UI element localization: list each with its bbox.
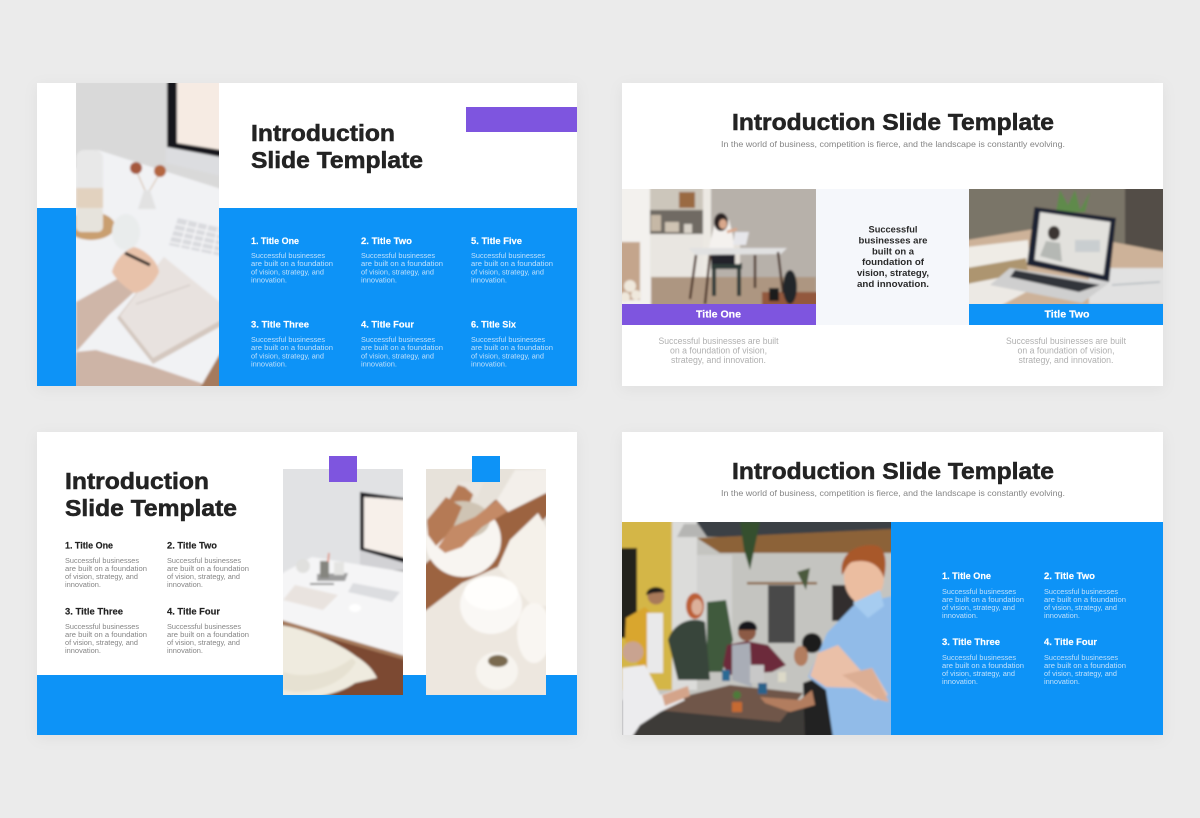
- slide 4 subtitle: In the world of business, competition is fierce, and the landscape is constantly evolving.: [721, 488, 1065, 498]
- item: 5. Title Five: of vision, strategy, and: [471, 270, 544, 276]
- slide 2 caption left: Successful businesses are built: [658, 336, 779, 346]
- item: 1. Title One: innovation.: [251, 278, 287, 284]
- slide 3: text left with two portrait photos: [37, 432, 577, 735]
- item: 1. Title One: are built on a foundation: [65, 566, 147, 573]
- slide 2 caption right: [1006, 336, 1126, 365]
- slide 2 panel: [622, 83, 1163, 386]
- item: 3. Title Three: are built on a foundation: [65, 632, 147, 639]
- item: 3. Title Three: [251, 320, 333, 368]
- item: 4. Title Four: 4. Title Four: [167, 606, 221, 616]
- item: 3. Title Three: innovation.: [251, 362, 287, 368]
- item: 1. Title One: 1. Title One: [251, 236, 299, 246]
- item: 4. Title Four: of vision, strategy, and: [361, 354, 434, 360]
- slide 3 title: [65, 468, 237, 521]
- slide 2 photo: laptop on desk: [967, 187, 1165, 306]
- slide 2 center statement: vision, strategy,: [857, 268, 929, 279]
- item: 4. Title Four: Successful businesses: [361, 337, 436, 344]
- slide 2 title: Introduction Slide Template: [732, 109, 1054, 135]
- item: 3. Title Three: of vision, strategy, and: [65, 640, 138, 647]
- item: 4. Title Four: innovation.: [1044, 679, 1080, 686]
- item: 2. Title Two: are built on a foundation: [1044, 597, 1126, 604]
- item: 1. Title One: Successful businesses: [251, 253, 326, 260]
- slide 2 subtitle: In the world of business, competition is fierce, and the landscape is constantly evolving.: [721, 139, 1065, 149]
- slide 4 blue panel: [891, 522, 1163, 735]
- slide 4 panel: [622, 432, 1163, 735]
- item: 4. Title Four: Successful businesses: [1044, 655, 1119, 662]
- item: 3. Title Three: 3. Title Three: [942, 637, 1000, 647]
- item: 4. Title Four: are built on a foundation: [1044, 663, 1126, 670]
- item: 4. Title Four: of vision, strategy, and: [167, 640, 240, 647]
- item: 1. Title One: Successful businesses: [942, 589, 1017, 596]
- slide 2 center statement: foundation of: [862, 257, 925, 268]
- item: 2. Title Two: of vision, strategy, and: [361, 270, 434, 276]
- item: 3. Title Three: Successful businesses: [65, 624, 140, 631]
- item: 4. Title Four: [1044, 637, 1126, 686]
- slide 4 title: Introduction Slide Template: [732, 458, 1054, 484]
- slide 2 label: Title Two: [969, 304, 1163, 325]
- item: 3. Title Three: of vision, strategy, and: [251, 354, 324, 360]
- item: 3. Title Three: 3. Title Three: [251, 320, 309, 330]
- item: 1. Title One: of vision, strategy, and: [942, 605, 1015, 612]
- slide 2 label: Title Two: Title Two: [1044, 308, 1090, 320]
- item: 1. Title One: [65, 540, 147, 589]
- item: 1. Title One: of vision, strategy, and: [251, 270, 324, 276]
- item: 3. Title Three: innovation.: [65, 648, 101, 655]
- slide 4 photo: team meeting: [620, 520, 893, 737]
- item: 4. Title Four: are built on a foundation: [167, 632, 249, 639]
- item: 2. Title Two: innovation.: [361, 278, 397, 284]
- slide 2 center statement: and innovation.: [857, 279, 929, 290]
- slide 1: photo left with six-item grid: [37, 81, 577, 388]
- item: 5. Title Five: are built on a foundation: [471, 261, 553, 268]
- item: 1. Title One: are built on a foundation: [942, 597, 1024, 604]
- item: 3. Title Three: Successful businesses: [251, 337, 326, 344]
- item: 4. Title Four: [167, 606, 249, 655]
- item: 4. Title Four: are built on a foundation: [361, 345, 443, 352]
- item: 4. Title Four: innovation.: [361, 362, 397, 368]
- slide 2 center statement: built on a: [872, 246, 915, 258]
- slide 3 photo: ceramic bowls: [424, 467, 551, 697]
- slide 2 center statement: Successful: [868, 224, 918, 236]
- item: 1. Title One: [942, 571, 1024, 620]
- item: 3. Title Three: are built on a foundation: [942, 663, 1024, 670]
- item: 4. Title Four: [361, 320, 443, 368]
- slide 2 caption right: Successful businesses are built: [1006, 336, 1126, 346]
- item: 4. Title Four: 4. Title Four: [361, 320, 415, 330]
- item: 2. Title Two: Successful businesses: [167, 558, 242, 565]
- item: 5. Title Five: Successful businesses: [471, 253, 546, 260]
- item: 6. Title Six: of vision, strategy, and: [471, 354, 544, 360]
- slide 3 panel: [37, 432, 577, 735]
- item: 3. Title Three: [942, 637, 1024, 686]
- item: 6. Title Six: [471, 320, 553, 368]
- item: 2. Title Two: are built on a foundation: [361, 261, 443, 268]
- slide 1 title: Slide Template: [251, 147, 423, 173]
- slide 1 purple accent: [466, 107, 577, 132]
- item: 1. Title One: innovation.: [942, 613, 978, 620]
- item: 5. Title Five: 5. Title Five: [471, 236, 522, 246]
- slide 2 caption left: [658, 336, 779, 365]
- item: 1. Title One: 1. Title One: [65, 540, 113, 550]
- item: 2. Title Two: 2. Title Two: [167, 540, 218, 550]
- slide 1 blue band: [37, 208, 577, 386]
- slide 2 caption left: strategy, and innovation.: [671, 355, 766, 365]
- item: 2. Title Two: innovation.: [1044, 613, 1080, 620]
- slide 3 purple square: [329, 456, 357, 482]
- slide 2 caption right: on a foundation of vision,: [1018, 346, 1114, 356]
- slide 2 center statement: [857, 224, 929, 290]
- item: 2. Title Two: are built on a foundation: [167, 566, 249, 573]
- item: 3. Title Three: Successful businesses: [942, 655, 1017, 662]
- item: 4. Title Four: Successful businesses: [167, 624, 242, 631]
- item: 3. Title Three: innovation.: [942, 679, 978, 686]
- item: 1. Title One: of vision, strategy, and: [65, 574, 138, 581]
- slide 3 blue square: [472, 456, 500, 482]
- item: 2. Title Two: of vision, strategy, and: [1044, 605, 1117, 612]
- item: 2. Title Two: 2. Title Two: [361, 236, 413, 246]
- slide 1 title: Introduction: [251, 120, 395, 146]
- item: 2. Title Two: [361, 236, 443, 284]
- slide 1 panel: [37, 83, 577, 386]
- slide 2 center statement: businesses are: [858, 236, 928, 246]
- item: 6. Title Six: innovation.: [471, 362, 507, 368]
- item: 3. Title Three: [65, 606, 147, 655]
- slide 3 blue band: [37, 675, 577, 735]
- slide 1 title: [251, 120, 423, 173]
- item: 5. Title Five: innovation.: [471, 278, 507, 284]
- item: 1. Title One: are built on a foundation: [251, 261, 333, 268]
- item: 2. Title Two: [167, 540, 249, 589]
- slide 2 center panel: [816, 189, 969, 325]
- item: 1. Title One: Successful businesses: [65, 558, 140, 565]
- slide 4: team photo with blue panel: [620, 432, 1163, 737]
- item: 6. Title Six: 6. Title Six: [471, 320, 516, 330]
- item: 2. Title Two: [1044, 571, 1126, 620]
- item: 5. Title Five: [471, 236, 553, 284]
- slide 2: two photos with captions: [620, 83, 1165, 386]
- item: 2. Title Two: innovation.: [167, 582, 203, 589]
- item: 4. Title Four: innovation.: [167, 648, 203, 655]
- item: 1. Title One: 1. Title One: [942, 571, 991, 581]
- slide 3 photo: desk with monitor and chair: [281, 467, 405, 697]
- slide 3 title: Slide Template: [65, 495, 237, 521]
- slide 1 photo: desk with notebook: [67, 81, 221, 388]
- item: 4. Title Four: 4. Title Four: [1044, 637, 1098, 647]
- slide 2 label: Title One: [622, 304, 816, 325]
- item: 1. Title One: [251, 236, 333, 284]
- slide 2 photo: woman at table: [620, 187, 818, 306]
- item: 3. Title Three: are built on a foundation: [251, 345, 333, 352]
- item: 3. Title Three: of vision, strategy, and: [942, 671, 1015, 678]
- slide 2 caption left: on a foundation of vision,: [670, 346, 767, 356]
- item: 2. Title Two: Successful businesses: [361, 253, 436, 260]
- slide 3 title: Introduction: [65, 468, 209, 494]
- item: 3. Title Three: 3. Title Three: [65, 606, 123, 616]
- item: 2. Title Two: 2. Title Two: [1044, 571, 1096, 581]
- slide 2 label: Title One: Title One: [696, 308, 741, 320]
- slide 2 caption right: strategy, and innovation.: [1018, 355, 1114, 365]
- item: 2. Title Two: of vision, strategy, and: [167, 574, 240, 581]
- item: 6. Title Six: are built on a foundation: [471, 345, 553, 352]
- item: 4. Title Four: of vision, strategy, and: [1044, 671, 1117, 678]
- item: 1. Title One: innovation.: [65, 582, 101, 589]
- item: 2. Title Two: Successful businesses: [1044, 589, 1119, 596]
- item: 6. Title Six: Successful businesses: [471, 337, 546, 344]
